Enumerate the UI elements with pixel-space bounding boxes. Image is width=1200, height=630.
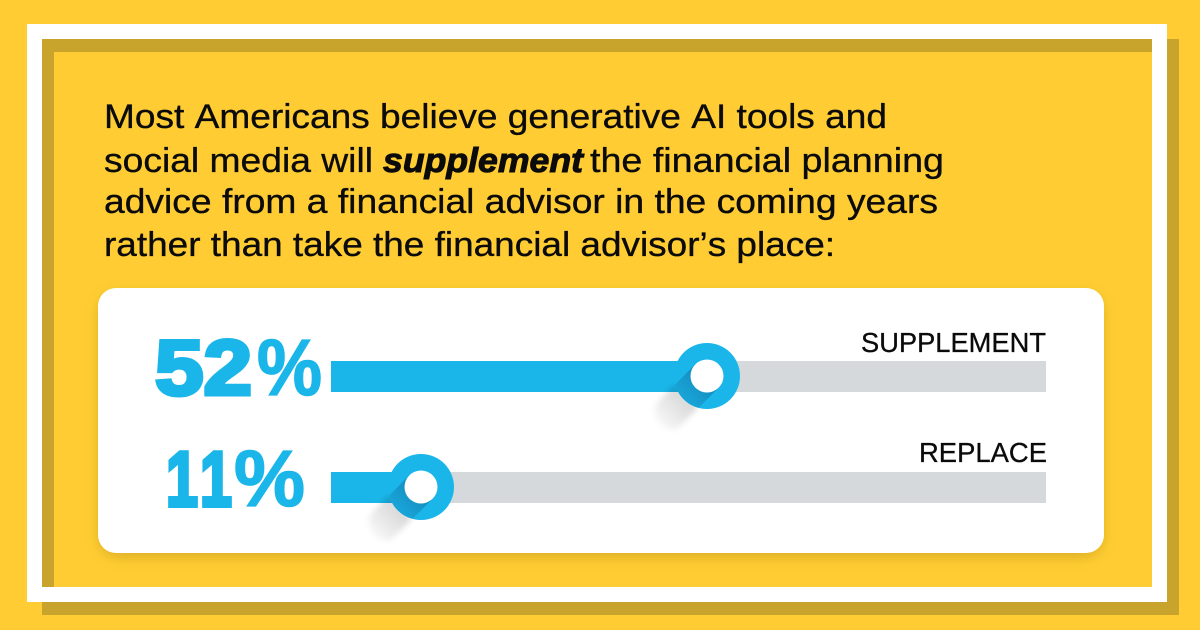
- heading text: [104, 98, 944, 264]
- panel: results card: [98, 288, 1104, 553]
- heading text: social media will: [104, 142, 373, 180]
- row: supplement 52%: [155, 323, 1046, 430]
- label REPLACE: REPLACE: [919, 437, 1047, 468]
- heading text: the financial planning: [590, 142, 944, 180]
- label SUPPLEMENT: SUPPLEMENT: [861, 327, 1046, 358]
- percentage 11%: 1: [166, 435, 198, 523]
- knob: [369, 454, 454, 541]
- percentage 11%: 1: [200, 435, 232, 523]
- heading text: rather than take the financial advisor’s place:: [104, 226, 835, 264]
- heading text: Most Americans believe generative AI tools and: [104, 98, 887, 136]
- track: [331, 361, 1046, 392]
- knob: [655, 343, 740, 430]
- percentage 52%: %: [257, 323, 322, 412]
- filled bar: [331, 472, 421, 503]
- percentage 11%: [166, 434, 305, 523]
- heading text: supplement: [383, 142, 585, 180]
- heading text: advice from a financial advisor in the coming years: [104, 183, 938, 221]
- percentage 11%: %: [234, 434, 305, 523]
- row: replace 11%: [166, 434, 1047, 541]
- percentage 52%: 52: [155, 324, 252, 412]
- card shadow: [100, 294, 1102, 556]
- percentage 52%: [155, 323, 322, 412]
- track: [331, 472, 1046, 503]
- filled bar: [331, 361, 707, 392]
